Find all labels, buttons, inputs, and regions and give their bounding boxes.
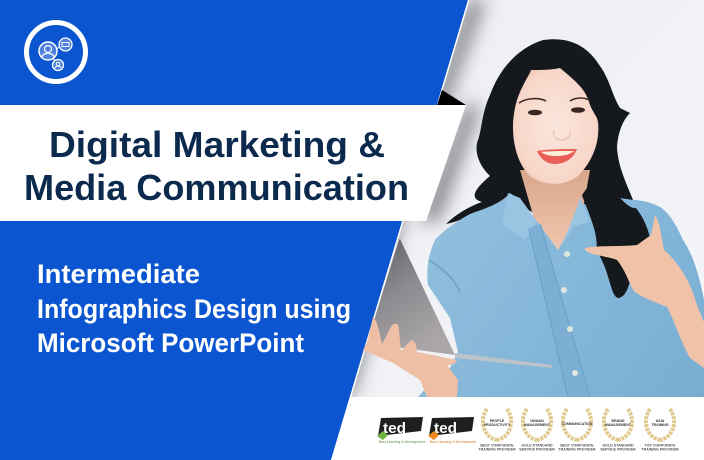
hair over shoulder <box>582 170 652 298</box>
badge titles: MANAGEMENT <box>524 423 551 427</box>
badge captions: TRAINING PROVIDER <box>478 448 516 452</box>
badges row <box>377 409 679 452</box>
badge captions: TRAINING PROVIDER <box>558 448 596 452</box>
badge: ted 1: Best Learning & Development <box>379 440 425 444</box>
person photo illustration <box>363 39 704 397</box>
badge: laurel 5 <box>646 409 674 440</box>
badge captions: SERVICE PROVIDER <box>519 448 555 452</box>
badge captions: SERVICE PROVIDER <box>600 448 636 452</box>
left hand <box>363 317 458 397</box>
badge: laurel 3 <box>563 409 591 440</box>
badge: ted 2: Best Learning & Development <box>430 440 476 444</box>
badge titles: PRODUCTIVITY <box>484 423 511 427</box>
title: Media Communication <box>24 167 409 208</box>
laptop <box>367 239 552 368</box>
badge: ted 2 <box>428 417 476 444</box>
badge: ted 1 <box>377 417 425 444</box>
blue panel <box>0 0 468 460</box>
icon: black fold triangle <box>437 90 466 105</box>
badge titles <box>484 419 669 427</box>
photo background <box>300 0 704 460</box>
shirt <box>418 193 704 397</box>
blue panel edge highlight <box>331 0 470 460</box>
shirt lower body <box>427 300 704 397</box>
subtitle: Infographics Design using <box>37 294 351 324</box>
badge captions: GOLD STANDARD <box>602 444 634 448</box>
subtitle: Intermediate <box>37 259 200 289</box>
badge captions: BEST CORPORATE <box>560 444 594 448</box>
white banner <box>0 105 466 221</box>
neck <box>520 170 590 250</box>
badge titles: MANAGEMENT <box>605 423 632 427</box>
badge captions: BEST CORPORATE <box>480 444 514 448</box>
badge titles: HUMAN <box>530 419 544 423</box>
badge: ted 2: ted <box>434 420 457 437</box>
hair back <box>446 39 652 298</box>
badge titles: PEOPLE <box>490 419 505 423</box>
badge titles: ASIA <box>656 419 665 423</box>
subtitle: Microsoft PowerPoint <box>37 328 304 358</box>
hair strand <box>560 62 598 120</box>
badge: ted 1: ted <box>383 420 406 437</box>
face <box>513 68 598 184</box>
badge: laurel 2 <box>523 409 551 440</box>
badge captions <box>478 444 679 452</box>
badge titles: TRAINING <box>651 423 669 427</box>
right hand pointing <box>585 215 704 368</box>
badge captions: TRAINING PROVIDER <box>641 448 679 452</box>
badge: laurel 1 <box>483 409 511 440</box>
badge titles: COMMUNICATION <box>561 422 593 426</box>
badge titles: BRAND <box>612 419 625 423</box>
facial features <box>519 98 590 164</box>
icon: network of people <box>26 22 86 82</box>
title: Digital Marketing & <box>49 124 385 165</box>
shirt collar and placket <box>429 193 590 397</box>
badge captions: GOLD STANDARD <box>521 444 553 448</box>
badge captions: TOP CORPORATE <box>645 444 676 448</box>
badge: laurel 4 <box>604 409 632 440</box>
